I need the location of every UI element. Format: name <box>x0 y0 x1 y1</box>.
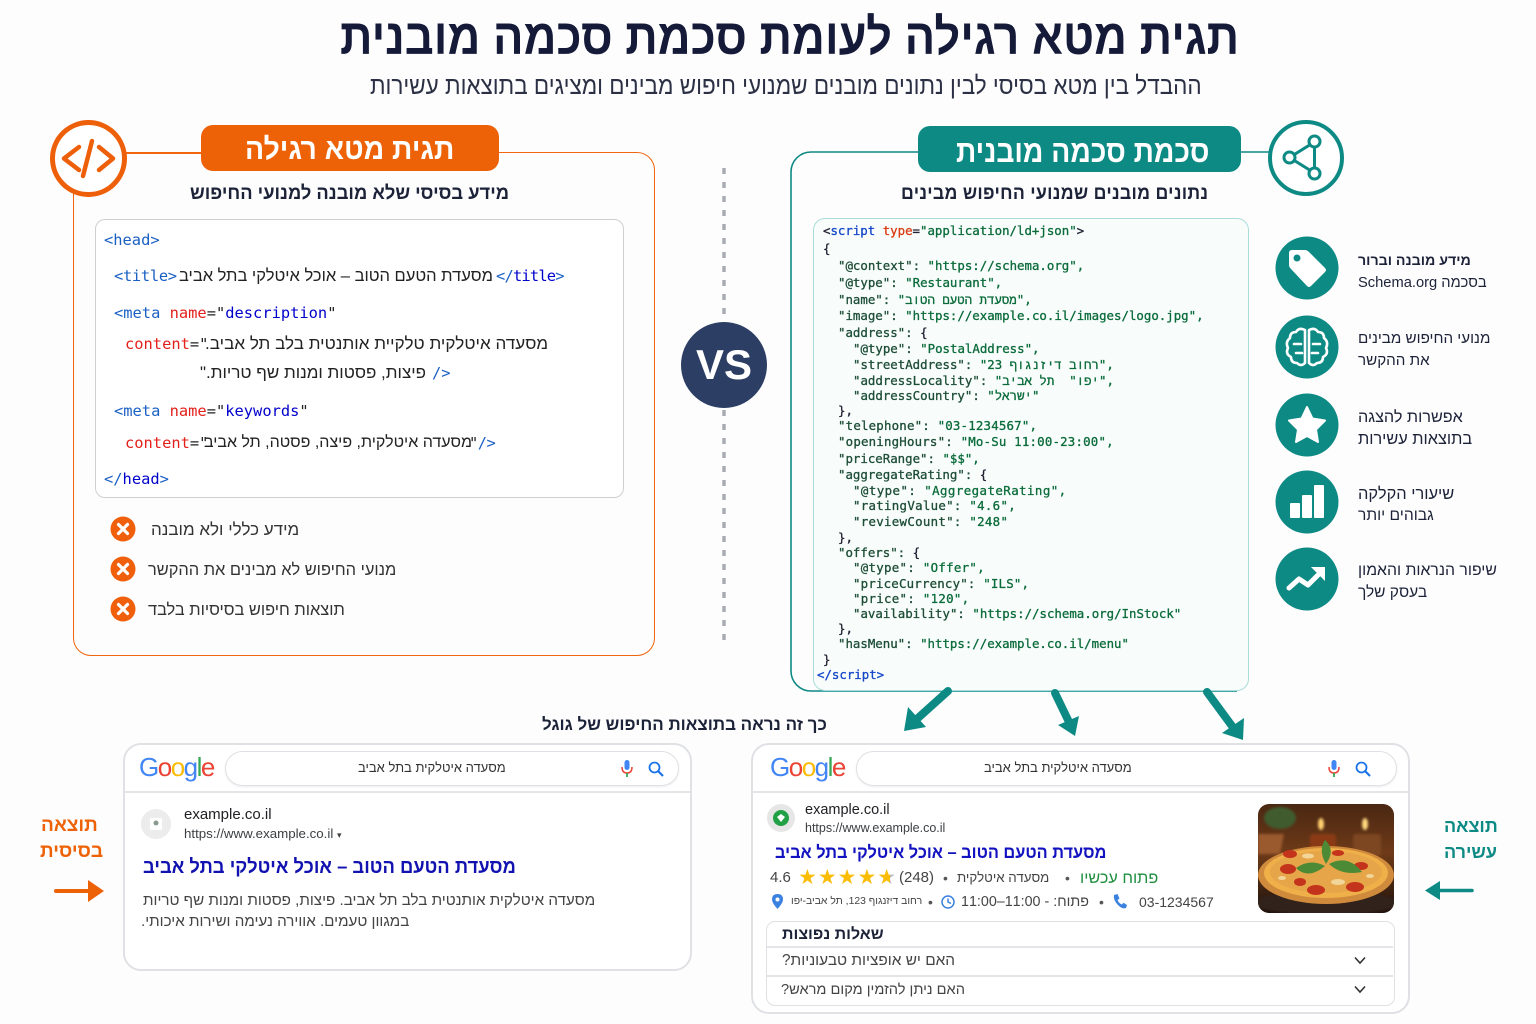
divider <box>753 791 1408 792</box>
item text: מנועי החיפוש לא מבינים את ההקשר <box>148 561 396 579</box>
benefit text <box>1358 330 1490 369</box>
line: את ההקשר <box>1358 352 1430 369</box>
address: רחוב דיזנגוף 123, תל אביב-יפו <box>791 896 922 907</box>
search query: מסעדה איטלקית בתל אביב <box>984 760 1132 775</box>
list: limitations <box>110 516 396 622</box>
divider <box>125 791 690 792</box>
faq box <box>766 921 1395 1006</box>
code: json-ld script: "offers": { <box>838 545 920 560</box>
vs badge <box>681 322 767 408</box>
code: json-ld script: "name": "מסעדת הטעם הטוב", <box>838 292 1032 307</box>
side label: basic result <box>40 815 104 902</box>
code box: json-ld <box>813 218 1249 691</box>
vs badge: VS <box>696 341 752 388</box>
benefit text <box>1358 253 1487 291</box>
rating row <box>770 865 1165 889</box>
code: description line 2: פיצות, פסטות ומנות שף טריות." <box>200 363 426 382</box>
heading badge <box>918 126 1241 172</box>
icon: tag <box>1276 236 1338 300</box>
google logo: Google <box>770 752 845 782</box>
arrow left <box>1424 878 1476 904</box>
icon: brain <box>1276 316 1338 378</box>
search bar <box>225 751 679 786</box>
label text: בסיסית <box>40 841 103 862</box>
code: keywords content attribute: content=" <box>125 434 208 452</box>
caption: google results: כך זה נראה בתוצאות החיפוש של גוגל <box>542 715 827 734</box>
icon: phone <box>1113 894 1127 909</box>
phone number: 03-1234567 <box>1139 894 1214 910</box>
image: pizza <box>1258 804 1394 913</box>
panel: structured schema <box>790 120 1344 692</box>
code: description line 1: מסעדה איטלקית טלקיית אותנטית בלב תל אביב. <box>205 334 548 353</box>
item text: תוצאות חיפוש בסיסיות בלבד <box>148 601 345 619</box>
code: json-ld script: "addressLocality": "תל אביב "יפו", <box>853 373 1114 388</box>
faq heading: שאלות נפוצות <box>782 926 884 943</box>
code: json-ld script: "@context": "https://schema.org", <box>838 258 1084 273</box>
code: title close: </title> <box>496 267 564 285</box>
icon: mic <box>621 760 633 777</box>
code: json-ld script: { <box>823 241 830 256</box>
icon: clock <box>941 895 955 909</box>
title: תגית מטא רגילה לעומת סכמת סכמה מובנית <box>340 9 1239 65</box>
code: title open: <title> <box>114 267 177 285</box>
code: json-ld script: "openingHours": "Mo-Su 11:00-23:00", <box>838 434 1114 449</box>
code: json-ld script: "ratingValue": "4.6", <box>853 498 1016 513</box>
question 2: האם ניתן להזמין מקום מראש? <box>781 982 965 998</box>
badge text: תגית מטא רגילה <box>245 133 454 166</box>
question 1: האם יש אופציות טבעוניות? <box>782 952 955 969</box>
card: rich google result <box>751 743 1410 1014</box>
icon: bar chart <box>1276 470 1338 534</box>
code: json-ld script: "address": { <box>838 325 928 340</box>
benefit text <box>1358 408 1472 448</box>
list: schema benefits <box>1276 236 1497 610</box>
panel subtitle: מידע בסיסי שלא מובנה למנועי החיפוש <box>190 183 509 204</box>
separator: • <box>1065 870 1070 886</box>
code: title text: מסעדת הטעם הטוב – אוכל איטלקי בתל אביב <box>179 267 493 285</box>
code: content attribute: content=" <box>125 335 208 353</box>
code: json-ld script: "@type": "AggregateRating", <box>853 483 1067 498</box>
site name: example.co.il <box>184 806 272 823</box>
code: json-ld script: "@type": "Offer", <box>853 560 985 575</box>
result snippet line 1: מסעדה איטלקית אותנטית בלב תל אביב. פיצות, פסטות ומנות שף טריות <box>143 892 595 909</box>
panel frame <box>790 151 1269 692</box>
hours: פתוח: - 11:00–11:00 <box>961 894 1089 910</box>
icon: x mark <box>110 516 136 542</box>
site name: example.co.il <box>805 802 890 818</box>
code: self close: /> <box>432 364 451 382</box>
favicon <box>141 809 171 839</box>
google logo: Google <box>139 752 214 782</box>
line: מידע מובנה וברור <box>1358 253 1471 269</box>
code: json-ld script: }, <box>838 403 853 418</box>
code: head open: <head> <box>104 231 160 249</box>
code: json-ld script: "@type": "Restaurant", <box>838 275 1002 290</box>
category: מסעדה איטלקית <box>957 870 1049 885</box>
search query: מסעדה איטלקית בתל אביב <box>358 760 506 775</box>
result snippet line 2: במגוון טעמים. אווירה נעימה ושירות איכותי. <box>141 913 409 930</box>
icon: search <box>1356 762 1371 777</box>
separator: • <box>943 870 948 886</box>
subtitle: ההבדל בין מטא בסיסי לבין נתונים מובנים שמנועי חיפוש מבינים ומציגים בתוצאות עשירות <box>370 72 1202 100</box>
arrow right <box>54 880 104 902</box>
code: meta description: <meta name="description" <box>114 304 336 322</box>
divider <box>767 946 1393 948</box>
label text: עשירה <box>1444 842 1497 862</box>
icon: search <box>648 762 664 777</box>
code: json-ld script: }, <box>838 621 853 636</box>
icon: schema graph <box>1268 120 1344 196</box>
separator: • <box>928 894 933 910</box>
code: json-ld script: </script> <box>817 667 884 682</box>
search bar <box>856 751 1397 786</box>
icon: code brackets <box>50 120 127 197</box>
panel: regular meta tag <box>50 120 655 656</box>
code: meta keywords: <meta name="keywords" <box>114 402 309 420</box>
divider <box>767 975 1393 976</box>
item text: מידע כללי ולא מובנה <box>151 520 299 539</box>
label text: תוצאה <box>41 815 98 836</box>
rating value: 4.6 <box>770 869 791 886</box>
code: json-ld script: "telephone": "03-1234567", <box>838 418 1037 433</box>
benefit text <box>1358 485 1454 524</box>
favicon <box>767 804 795 832</box>
result title: מסעדת הטעם הטוב – אוכל איטלקי בתל אביב <box>143 856 516 878</box>
code: json-ld script: "image": "https://example.co.il/images/logo.jpg", <box>838 308 1204 323</box>
review count: (248) <box>899 869 934 886</box>
connector line <box>126 152 206 154</box>
side label: rich result <box>1424 812 1498 904</box>
benefit text <box>1358 562 1497 601</box>
panel subtitle: נתונים מובנים שמנועי החיפוש מבינים <box>901 183 1208 204</box>
icon: trend up <box>1276 548 1338 610</box>
label text: תוצאה <box>1444 816 1498 836</box>
code: json-ld script: "hasMenu": "https://example.co.il/menu" <box>838 636 1129 651</box>
line: גבוהים יותר <box>1358 507 1434 524</box>
line: שיפור הנראות והאמון <box>1358 562 1497 579</box>
panel frame <box>73 152 655 656</box>
code: keywords close: "/> <box>469 434 495 452</box>
icon: pin <box>772 894 783 909</box>
icon: mic <box>1328 760 1340 777</box>
icon: star <box>1276 394 1338 456</box>
badge text: סכמת סכמה מובנית <box>956 134 1209 169</box>
code: json-ld script: "availability": "https://schema.org/InStock" <box>853 606 1181 621</box>
open status: פתוח עכשיו <box>1080 869 1158 887</box>
card: basic google result <box>123 743 692 971</box>
separator: • <box>1099 894 1104 910</box>
code: json-ld script: <script type="application/ld+json"> <box>823 223 1084 238</box>
stars: ★★★★★ <box>798 865 897 889</box>
code: json-ld script: }, <box>838 530 853 545</box>
code: json-ld script: } <box>823 652 830 667</box>
line: שיעורי הקלקה <box>1358 485 1454 503</box>
code: json-ld script: "@type": "PostalAddress", <box>853 341 1040 356</box>
code: json-ld script: "priceRange": "$$", <box>838 451 980 466</box>
icon: x mark <box>110 556 136 582</box>
code: json-ld script: "priceCurrency": "ILS", <box>853 576 1029 591</box>
code: json-ld script <box>817 223 1204 682</box>
line: מנועי החיפוש מבינים <box>1358 330 1490 347</box>
site url: https://www.example.co.il <box>805 821 945 835</box>
site url: https://www.example.co.il ▾ <box>184 826 342 841</box>
dotted line <box>722 168 726 640</box>
code: json-ld script: "streetAddress": "רחוב דיזנגוף 23", <box>853 357 1114 372</box>
line: בתוצאות עשירות <box>1358 430 1472 448</box>
line: בעסק שלך <box>1358 584 1427 601</box>
code: json-ld script: "price": "120", <box>853 591 969 606</box>
code: keywords text: מסעדה איטלקית, פיצה, פסטה, תל אביב <box>204 434 472 451</box>
heading badge <box>201 125 499 171</box>
icon: chevron <box>1354 985 1366 994</box>
code: json-ld script: "reviewCount": "248" <box>853 514 1008 529</box>
icon: chevron <box>1354 956 1366 965</box>
icon: x mark <box>110 596 136 622</box>
details row <box>770 890 1220 912</box>
result title: מסעדת הטעם הטוב – אוכל איטלקי בתל אביב <box>775 842 1106 862</box>
code box: html head <box>95 219 624 498</box>
line: בסכמה Schema.org <box>1358 275 1487 291</box>
code: head close: </head> <box>104 470 169 488</box>
line: אפשרות להצגה <box>1358 408 1463 426</box>
code: json-ld script: "aggregateRating": { <box>838 467 987 482</box>
code: json-ld script: "addressCountry": "ישראל" <box>853 388 1039 403</box>
arrows: schema to rich result <box>904 687 1244 740</box>
